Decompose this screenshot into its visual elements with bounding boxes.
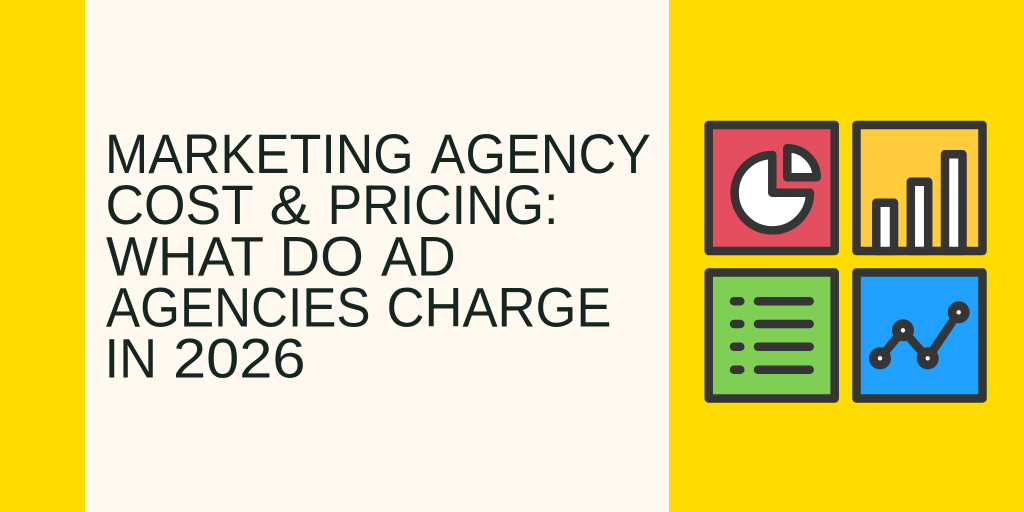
- title: COST: [106, 174, 254, 236]
- title: CHARGE: [386, 277, 612, 339]
- panel: cream title background: [85, 0, 669, 512]
- icon: line chart tile: [856, 272, 982, 398]
- title: AGENCIES: [106, 277, 370, 339]
- title: &: [270, 174, 310, 236]
- title: AD: [381, 225, 456, 287]
- icon: bar chart tile: [856, 125, 982, 251]
- title: MARKETING: [105, 123, 414, 185]
- icon: list tile: [709, 272, 835, 398]
- title: AGENCY: [430, 123, 651, 185]
- title: DO: [280, 225, 364, 287]
- title: [104, 123, 651, 389]
- title: 2026: [173, 327, 306, 389]
- title: WHAT: [106, 225, 264, 287]
- title: IN: [104, 327, 157, 389]
- title: PRICING:: [328, 174, 558, 236]
- icon: pie chart tile: [709, 125, 835, 251]
